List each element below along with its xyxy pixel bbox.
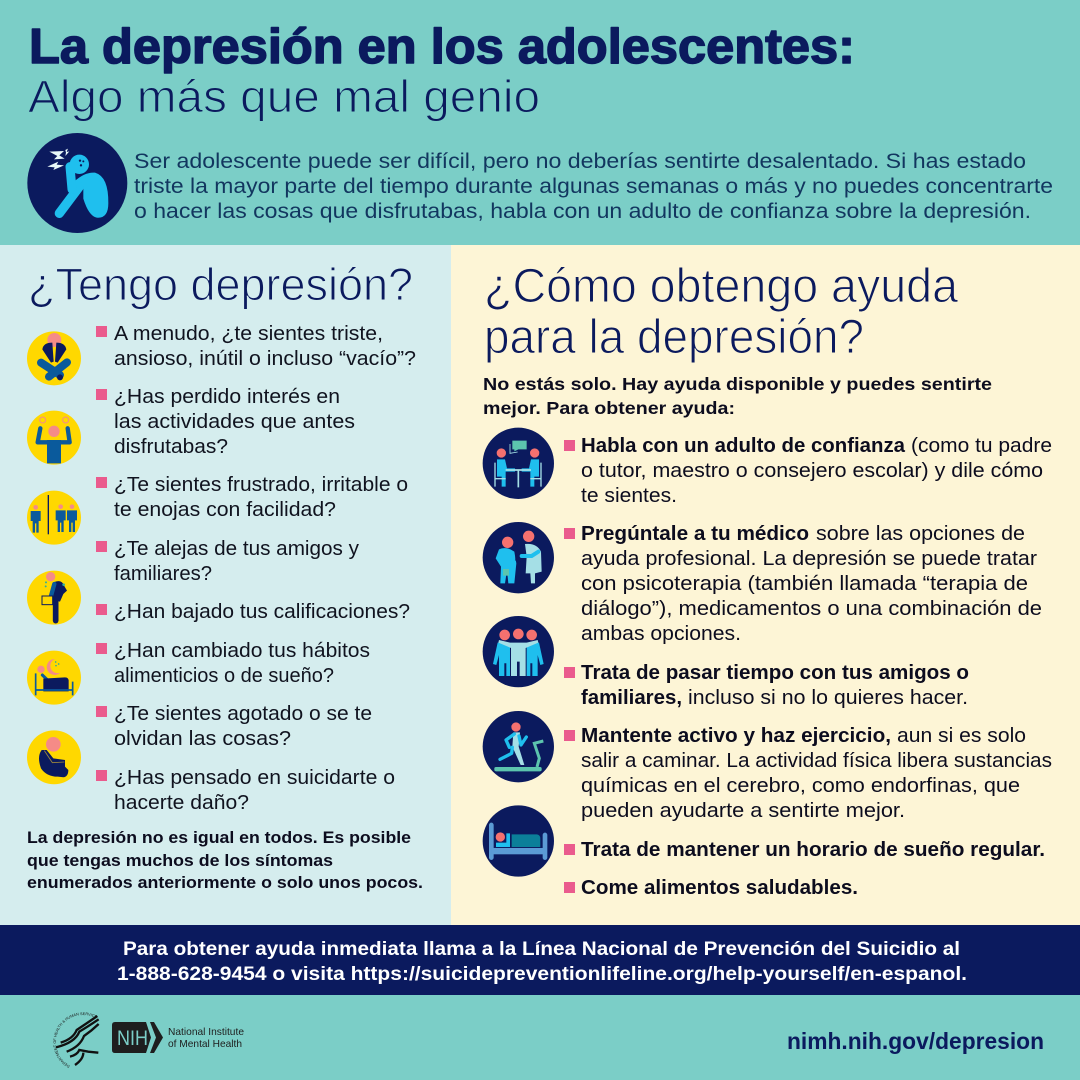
bullet: suicide <box>96 766 395 814</box>
logo: HHS eagle: DEPARTMENT OF HEALTH & HUMAN SERVICES • USA <box>53 1012 96 1068</box>
bullet: friends: familiares? <box>114 562 212 585</box>
item: doctor: ayuda profesional. La depresión se puede tratar <box>581 547 1037 570</box>
heading: Tengo depresión: ¿Tengo depresión? <box>28 259 413 310</box>
icon: isolated person <box>27 491 81 545</box>
label: National Institute of Mental Health: National Institute <box>168 1026 244 1038</box>
bullet: interest: disfrutabas? <box>114 435 228 458</box>
item: food: Come alimentos saludables. <box>581 877 858 899</box>
bullet: habits <box>96 639 370 687</box>
note: depression differs: enumerados anteriormente o solo unos pocos. <box>27 874 423 892</box>
icon: bed <box>483 805 554 877</box>
icon: sleep problems <box>27 651 81 705</box>
item: friends and family: Trata de pasar tiempo con tus amigos o <box>581 662 969 684</box>
bullet: friends: ¿Te alejas de tus amigos y <box>114 537 360 560</box>
note: depression differs: La depresión no es igual en todos. Es posible <box>27 829 411 847</box>
subtitle: Algo más que mal genio <box>28 71 540 122</box>
item: friends and family: familiares, <box>581 687 682 709</box>
bullet: interest: ¿Has perdido interés en <box>114 385 340 408</box>
bullet: habits: alimenticios o de sueño? <box>114 664 334 687</box>
banner: crisis line: 1-888-628-9454 o visita https://suicidepreventionlifeline.org/help-yourself/en-espanol. <box>117 963 967 985</box>
item: friends and family <box>564 662 969 709</box>
website link: nimh.nih.gov/depresion <box>787 1028 1044 1054</box>
item: trusted adult: o tutor, maestro o consejero escolar) y dile cómo <box>581 459 1043 482</box>
item: trusted adult: te sientes. <box>581 484 677 507</box>
item: exercise <box>564 724 1052 822</box>
item: trusted adult <box>564 434 1052 507</box>
icon: doctor <box>483 522 554 593</box>
bullet: interest: las actividades que antes <box>114 410 355 433</box>
symptom list <box>96 322 416 814</box>
bullet: tired: olvidan las cosas? <box>114 727 291 750</box>
logo: HHS eagle <box>53 1012 100 1068</box>
item: exercise: salir a caminar. La actividad física libera sustancias <box>581 749 1052 772</box>
bullet: friends <box>96 537 360 585</box>
item: doctor: sobre las opciones de <box>816 522 1025 545</box>
lead text: mejor. Para obtener ayuda: <box>483 398 735 418</box>
bullet: frustrated: te enojas con facilidad? <box>114 498 336 521</box>
bullet: habits: ¿Han cambiado tus hábitos <box>114 639 370 662</box>
bullet: interest <box>96 385 355 458</box>
header panel <box>0 0 1080 245</box>
item: exercise: pueden ayudarte a sentirte mejor. <box>581 799 905 822</box>
bullet: grades: ¿Han bajado tus calificaciones? <box>114 600 410 623</box>
help list <box>564 434 1052 899</box>
item: doctor: Pregúntale a tu médico <box>581 523 809 545</box>
item: friends and family: incluso si no lo quieres hacer. <box>688 686 968 709</box>
intro text: o hacer las cosas que disfrutabas, habla con un adulto de confianza sobre la depresión. <box>134 199 1031 223</box>
logo: NIH: NIH <box>117 1027 148 1050</box>
item: doctor: diálogo”), medicamentos o una combinación de <box>581 597 1042 620</box>
icon: failing grades <box>27 571 81 625</box>
heading: Cómo obtengo ayuda: ¿Cómo obtengo ayuda <box>484 260 958 313</box>
item: doctor: ambas opciones. <box>581 622 741 645</box>
note: depression differs: que tengas muchos de los síntomas <box>27 852 333 870</box>
intro text <box>134 149 1053 223</box>
label: National Institute of Mental Health <box>168 1026 244 1050</box>
bullet: sad: ansioso, inútil o incluso “vacío”? <box>114 347 416 370</box>
label: National Institute of Mental Health: of Mental Health <box>168 1038 242 1050</box>
item: exercise: Mantente activo y haz ejercicio, <box>581 725 891 747</box>
icon: exhausted person <box>27 730 81 784</box>
bullet: tired: ¿Te sientes agotado o se te <box>114 702 372 725</box>
logo: NIH <box>112 1022 163 1053</box>
heading: Cómo obtengo ayuda: para la depresión? <box>484 311 864 364</box>
bullet: tired <box>96 702 372 750</box>
icon: distressed teen <box>27 133 127 233</box>
icon: treadmill <box>483 711 554 782</box>
bullet: suicide: hacerte daño? <box>114 791 249 814</box>
panel: am I depressed <box>0 245 451 925</box>
item: exercise: aun si es solo <box>897 724 1026 747</box>
lead text <box>483 374 992 418</box>
item: trusted adult: Habla con un adulto de confianza <box>581 435 906 457</box>
item: sleep: Trata de mantener un horario de sueño regular. <box>581 839 1045 861</box>
item: doctor: con psicoterapia (también llamada “terapia de <box>581 572 1028 595</box>
icon: sad crossed legs <box>27 331 81 385</box>
item: doctor <box>564 522 1042 645</box>
icon: talking at table <box>483 428 554 499</box>
intro text: triste la mayor parte del tiempo durante algunas semanas o más y no puedes concentrarte <box>134 174 1053 198</box>
item: trusted adult: (como tu padre <box>911 434 1052 457</box>
banner: crisis line <box>0 925 1080 995</box>
bullet: sad: A menudo, ¿te sientes triste, <box>114 322 383 345</box>
bullet: suicide: ¿Has pensado en suicidarte o <box>114 766 395 789</box>
lead text: No estás solo. Hay ayuda disponible y puedes sentirte <box>483 374 992 394</box>
bullet: sad <box>96 322 416 370</box>
intro text: Ser adolescente puede ser difícil, pero no deberías sentirte desalentado. Si has estado <box>134 149 1026 173</box>
panel: how to get help <box>451 245 1080 925</box>
note: depression differs <box>27 829 423 892</box>
banner: crisis line: Para obtener ayuda inmediata llama a la Línea Nacional de Prevención del Suicidio al <box>123 938 960 960</box>
item: exercise: químicas en el cerebro, como endorfinas, que <box>581 774 1020 797</box>
bullet: frustrated <box>96 473 408 521</box>
icon: friends <box>483 616 554 687</box>
title: La depresión en los adolescentes: <box>29 20 855 74</box>
bullet: frustrated: ¿Te sientes frustrado, irritable o <box>114 473 408 496</box>
footer <box>53 1012 1044 1068</box>
heading: Cómo obtengo ayuda <box>484 260 958 364</box>
icon: frustrated person <box>27 411 81 465</box>
